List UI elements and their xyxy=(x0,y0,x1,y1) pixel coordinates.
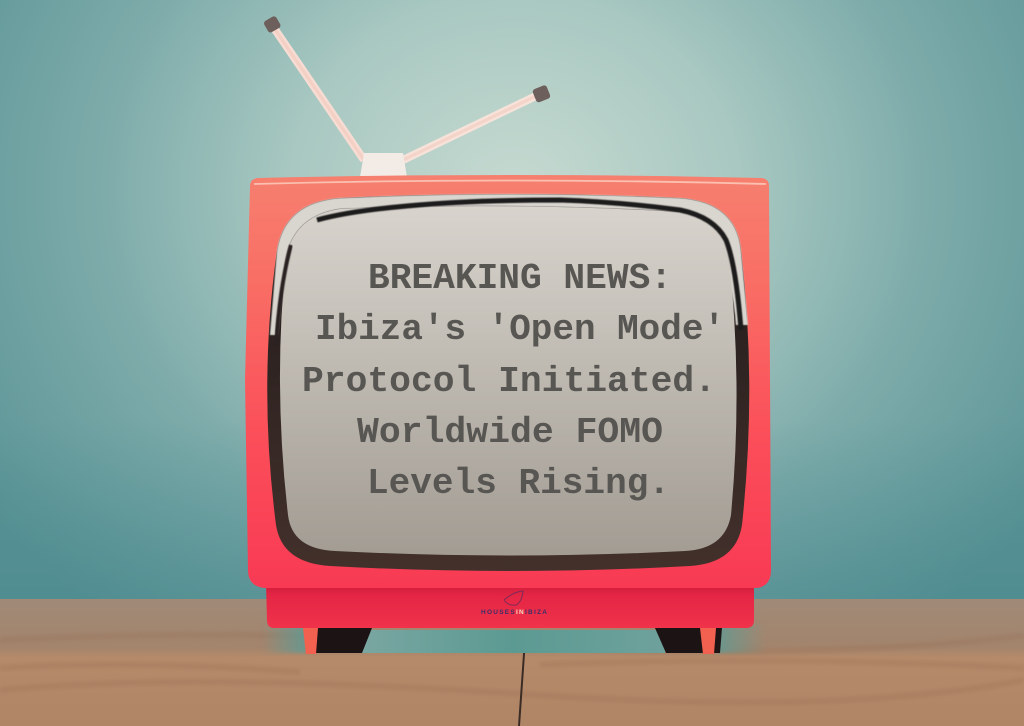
logo: Houses in Ibiza xyxy=(481,591,547,616)
gap under TV showing teal reflection xyxy=(360,630,665,653)
headline on screen: Ibiza's 'Open Mode' xyxy=(315,309,725,350)
TV top highlight xyxy=(254,180,766,184)
antenna: left rod xyxy=(274,28,364,160)
screen xyxy=(280,206,737,556)
headline on screen: Levels Rising. xyxy=(367,463,670,504)
screen bezel xyxy=(267,194,749,571)
reflection on table beside the feet xyxy=(262,625,766,653)
headline on screen: Protocol Initiated. xyxy=(302,361,716,402)
antenna xyxy=(263,15,551,177)
left foot shadow xyxy=(316,628,372,653)
TV feet xyxy=(303,628,722,654)
bezel dark crescent left xyxy=(276,245,291,345)
right foot shadow xyxy=(655,628,722,653)
TV body xyxy=(245,175,771,588)
headline on screen: BREAKING NEWS: xyxy=(368,258,672,299)
left foot xyxy=(303,628,318,654)
bezel chrome top xyxy=(270,194,748,335)
wooden table xyxy=(0,599,1024,726)
antenna: base xyxy=(360,153,407,177)
TV lower base xyxy=(266,584,754,628)
headline on screen: Worldwide FOMO xyxy=(357,412,663,453)
antenna: right rod xyxy=(403,96,536,160)
logo mark xyxy=(504,591,523,605)
bezel dark line top xyxy=(317,200,741,330)
antenna: left tip xyxy=(263,15,282,34)
antenna: right tip xyxy=(532,85,551,103)
right foot xyxy=(700,628,716,654)
logo wordmark: HOUSESINIBIZA xyxy=(481,609,547,616)
headline on screen xyxy=(302,258,725,504)
